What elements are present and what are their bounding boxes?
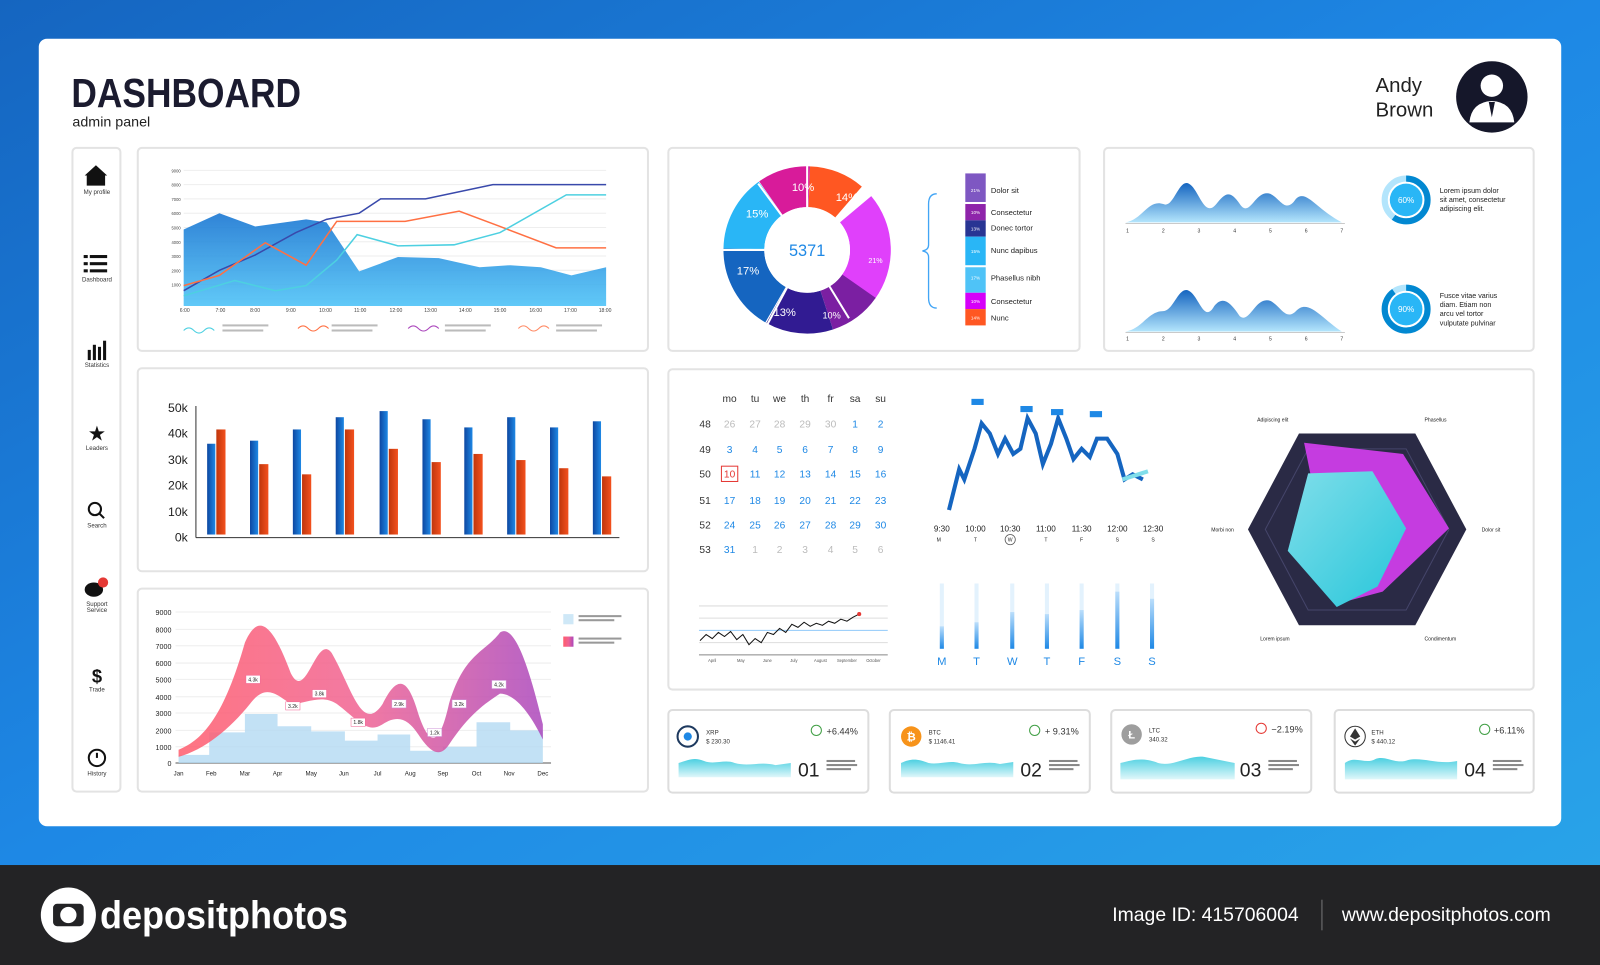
calendar: 26	[774, 520, 786, 531]
crypto card: ETH: ETH	[1371, 729, 1384, 736]
title: DASHBOARD	[71, 70, 301, 116]
panel: area wave chart: Oct	[472, 770, 482, 777]
calendar: 31	[724, 545, 736, 556]
panel: wave charts: adipiscing elit.	[1440, 205, 1485, 213]
sidebar: Dashboard	[82, 277, 112, 284]
crypto card: LTC: −2.19%	[1271, 724, 1303, 734]
panel: line chart: 4000	[172, 240, 181, 245]
panel: line chart	[138, 148, 648, 351]
footer bar: depositphotos	[100, 894, 348, 937]
calendar: 29	[799, 419, 811, 430]
sidebar: Support	[86, 601, 108, 608]
small line chart: October	[866, 658, 881, 663]
panel: area wave chart: 4000	[156, 694, 171, 702]
panel: line chart: 16:00	[529, 308, 542, 314]
panel: donut: Nunc dapibus	[991, 246, 1038, 255]
panel: donut: 10%	[971, 210, 980, 215]
panel: area wave chart: Apr	[273, 770, 282, 777]
footer bar: Image ID: 415706004	[1112, 904, 1299, 926]
calendar: 2	[878, 419, 884, 430]
panel: donut: Nunc	[991, 313, 1009, 322]
calendar: 15	[849, 469, 861, 480]
vertical progress bars: S	[1114, 656, 1121, 668]
panel: area wave chart: Feb	[206, 770, 217, 777]
panel: wave charts: 4	[1233, 337, 1236, 343]
crypto card: XRP: 01	[798, 759, 820, 781]
panel: donut: 14%	[971, 315, 980, 320]
small line chart: July	[790, 658, 798, 663]
panel: wave charts: 3	[1198, 337, 1201, 343]
panel: donut: Consectetur	[991, 297, 1032, 306]
small line chart: June	[763, 658, 773, 663]
panel: line chart: 9000	[172, 168, 181, 173]
vertical progress bars: F	[1078, 656, 1085, 668]
calendar: 4	[752, 445, 758, 456]
panel: area wave chart: 3.2k	[454, 702, 464, 708]
panel: area wave chart: Sep	[437, 770, 449, 777]
calendar: 27	[749, 419, 761, 430]
stock line chart: 10:00	[965, 524, 986, 533]
panel: wave charts: 7	[1340, 229, 1343, 235]
small line chart	[699, 606, 888, 663]
calendar: sa	[850, 394, 861, 405]
crypto card: LTC: 340.32	[1149, 737, 1168, 744]
panel: donut: 10%	[792, 182, 814, 194]
panel: bar chart: 40k	[168, 427, 189, 441]
calendar: th	[801, 394, 809, 405]
calendar: 5	[777, 445, 783, 456]
panel: wave charts: 4	[1233, 229, 1236, 235]
panel: line chart: 12:00	[390, 308, 402, 314]
stock line chart: F	[1080, 538, 1083, 544]
stock line chart: 12:00	[1107, 524, 1128, 533]
panel: line chart: 6:00	[180, 308, 190, 314]
panel: area wave chart: Jan	[174, 770, 184, 777]
panel: wave charts: 1	[1126, 229, 1129, 235]
calendar: 53	[699, 545, 711, 556]
panel: donut: 10%	[822, 310, 841, 320]
stock line chart: 9:30	[934, 524, 950, 533]
panel: wave charts: 60%	[1398, 196, 1414, 205]
panel: area wave chart: 1000	[156, 744, 171, 752]
panel: wave charts: 2	[1162, 229, 1165, 235]
hexagon radar chart: Adipiscing elit	[1257, 417, 1289, 423]
panel: area wave chart: 3.2k	[288, 704, 298, 710]
panel: line chart: 6000	[172, 211, 181, 216]
panel: line chart: 18:00	[599, 308, 612, 314]
calendar: 52	[699, 520, 711, 531]
panel: area wave chart: 9000	[156, 609, 171, 617]
main card	[39, 39, 1561, 826]
panel: donut	[668, 148, 1080, 351]
panel: line chart: 11:00	[354, 308, 367, 314]
panel: area wave chart	[138, 589, 648, 792]
crypto card: XRP	[668, 710, 868, 793]
panel: donut: Donec tortor	[991, 224, 1033, 233]
panel: area wave chart: Dec	[537, 770, 548, 777]
small line chart: May	[737, 658, 746, 663]
panel: donut: 17%	[737, 265, 759, 277]
panel: donut: Phasellus nibh	[991, 274, 1041, 283]
calendar: 20	[799, 496, 811, 507]
calendar: 1	[852, 419, 858, 430]
calendar: su	[875, 394, 886, 405]
user	[1376, 61, 1528, 133]
panel: wave charts: 90%	[1398, 305, 1414, 314]
panel: line chart: 3000	[172, 254, 181, 259]
calendar: 6	[878, 545, 884, 556]
panel: area wave chart: 1.2k	[430, 730, 440, 736]
panel: wave charts: arcu vel tortor	[1440, 310, 1484, 318]
panel: line chart: 5000	[172, 226, 181, 231]
panel: wave charts: sit amet, consectetur	[1440, 196, 1506, 204]
hexagon radar chart: Morbi non	[1211, 527, 1234, 533]
hexagon radar chart: Lorem ipsum	[1260, 637, 1290, 643]
stock line chart: S	[1151, 538, 1155, 544]
panel: donut: 10%	[971, 299, 980, 304]
panel: line chart: 9:00	[286, 308, 296, 314]
hexagon radar chart: Condimentum	[1424, 637, 1456, 643]
panel: line chart: 7:00	[215, 308, 226, 314]
panel: area wave chart: 6000	[156, 660, 171, 668]
panel: area wave chart: 3000	[156, 710, 171, 718]
sidebar: Search	[87, 522, 107, 529]
panel: area wave chart: Jul	[374, 770, 381, 777]
calendar: 7	[828, 445, 834, 456]
panel: line chart: 14:00	[459, 308, 472, 314]
crypto card: LTC: 03	[1240, 759, 1261, 781]
small line chart: August	[814, 658, 828, 663]
vertical progress bars: T	[1044, 656, 1051, 668]
crypto card: LTC: Ł	[1128, 730, 1135, 742]
crypto card: BTC: 02	[1020, 759, 1042, 781]
vertical progress bars: M	[937, 656, 947, 668]
panel: donut: 17%	[971, 276, 980, 281]
panel: area wave chart: Mar	[240, 770, 250, 777]
calendar: we	[772, 394, 786, 405]
calendar: 5	[852, 545, 858, 556]
stock line chart: T	[974, 538, 977, 544]
sidebar: Service	[87, 607, 108, 614]
panel: wave charts: 5	[1269, 337, 1272, 343]
calendar: 25	[749, 520, 761, 531]
panel: area wave chart: Nov	[504, 770, 516, 777]
calendar: 28	[825, 520, 837, 531]
panel: donut: 21%	[868, 257, 883, 265]
stock line chart: 11:00	[1036, 524, 1056, 533]
panel: area wave chart: 4.3k	[248, 677, 258, 683]
calendar: 30	[875, 520, 887, 531]
panel: bar chart: 20k	[168, 479, 189, 493]
panel: wave charts: 5	[1269, 229, 1272, 235]
crypto card: XRP: +6.44%	[827, 726, 858, 736]
vertical progress bars: S	[1148, 656, 1156, 668]
calendar: 4	[828, 545, 834, 556]
calendar: 12	[774, 469, 786, 480]
panel: area wave chart: Jun	[339, 770, 349, 777]
panel: wave charts: vulputate pulvinar	[1440, 319, 1496, 327]
stock line chart: 12:30	[1143, 524, 1164, 533]
sidebar: My profile	[84, 189, 111, 196]
footer bar	[0, 865, 1600, 965]
panel: donut: Dolor sit	[991, 186, 1020, 195]
panel: bar chart	[138, 368, 648, 571]
panel: donut: 5371	[789, 242, 825, 260]
crypto card: BTC: BTC	[929, 729, 941, 736]
sidebar: Leaders	[86, 445, 108, 452]
crypto card: LTC	[1111, 710, 1311, 793]
panel: wave charts: Lorem ipsum dolor	[1440, 187, 1499, 195]
panel: area wave chart: 0	[167, 760, 171, 768]
calendar	[699, 394, 887, 556]
sidebar: ★	[88, 424, 106, 446]
panel: area wave chart: 5000	[156, 676, 171, 684]
panel: donut: Consectetur	[991, 208, 1032, 217]
calendar: 18	[749, 496, 761, 507]
panel: area wave chart: 2.9k	[394, 702, 404, 708]
stock line chart: M	[937, 538, 941, 544]
small line chart: April	[708, 658, 716, 663]
panel: area wave chart: May	[305, 770, 318, 777]
calendar: 24	[724, 520, 736, 531]
panel: wave charts: 6	[1305, 337, 1308, 343]
small line chart: September	[837, 658, 858, 663]
panel: area wave chart: 4.2k	[494, 683, 504, 689]
panel: line chart: 8000	[172, 183, 181, 188]
panel: wave charts: 1	[1126, 337, 1129, 343]
sidebar: Statistics	[85, 362, 109, 369]
calendar: 8	[852, 445, 858, 456]
calendar: 51	[699, 496, 711, 507]
panel: line chart: 15:00	[494, 308, 507, 314]
panel: area wave chart: 7000	[156, 643, 171, 651]
user: Brown	[1376, 99, 1433, 121]
calendar: 22	[849, 496, 861, 507]
panel: big analytics	[668, 369, 1534, 690]
calendar: 26	[724, 419, 736, 430]
stock line chart: S	[1116, 538, 1120, 544]
crypto card: XRP: XRP	[706, 729, 719, 736]
calendar: 17	[724, 496, 736, 507]
hexagon radar chart: Dolor sit	[1482, 527, 1501, 533]
panel: donut: 15%	[746, 208, 768, 220]
calendar: 3	[727, 445, 733, 456]
panel: wave charts: diam. Etiam non	[1440, 301, 1491, 309]
footer bar: www.depositphotos.com	[1341, 904, 1551, 926]
panel: line chart: 2000	[172, 268, 181, 273]
panel: donut: 13%	[971, 227, 980, 232]
panel: wave charts: 3	[1198, 229, 1201, 235]
calendar: fr	[827, 394, 834, 405]
calendar: 11	[750, 469, 761, 480]
panel: wave charts: 7	[1340, 337, 1343, 343]
panel: donut: 21%	[971, 188, 980, 193]
crypto card: BTC	[890, 710, 1090, 793]
crypto card: ETH: +6.11%	[1494, 725, 1525, 735]
vertical progress bars	[937, 583, 1156, 668]
sidebar	[72, 148, 120, 792]
panel: bar chart: 50k	[168, 401, 189, 415]
panel: wave charts: Fusce vitae varius	[1440, 292, 1498, 300]
stock line chart	[934, 399, 1164, 545]
calendar: 19	[774, 496, 786, 507]
panel: bar chart: 0k	[175, 531, 189, 545]
crypto card: XRP: $ 230.30	[706, 739, 731, 746]
calendar: 23	[875, 496, 887, 507]
calendar: 6	[802, 445, 808, 456]
stock line chart: 10:30	[1000, 524, 1021, 533]
panel: donut: 14%	[836, 192, 858, 204]
hexagon radar chart: Phasellus	[1424, 417, 1447, 423]
panel: area wave chart: Aug	[405, 770, 416, 777]
title	[71, 70, 301, 130]
crypto card: ETH	[1335, 710, 1534, 793]
panel: line chart: 17:00	[564, 308, 577, 314]
crypto card: BTC: $ 1146.41	[929, 739, 956, 746]
panel: line chart: 10:00	[319, 308, 332, 314]
stock line chart: T	[1044, 538, 1047, 544]
panel: line chart: 7000	[172, 197, 181, 202]
panel: bar chart: 30k	[168, 453, 189, 467]
sidebar: History	[87, 770, 107, 777]
calendar: 2	[777, 545, 783, 556]
calendar: 29	[849, 520, 861, 531]
stock line chart: W	[1008, 538, 1013, 544]
sidebar: Trade	[89, 687, 105, 694]
calendar: 48	[699, 419, 711, 430]
crypto card: LTC: LTC	[1149, 727, 1161, 734]
panel: area wave chart: 1.8k	[353, 720, 363, 726]
calendar: 10	[724, 469, 736, 480]
panel: wave charts: 2	[1162, 337, 1165, 343]
calendar: 49	[699, 445, 711, 456]
stock line chart: 11:30	[1072, 524, 1092, 533]
crypto card: BTC: ₿	[907, 732, 916, 744]
calendar: 28	[774, 419, 786, 430]
calendar: 27	[799, 520, 811, 531]
calendar: 14	[825, 469, 837, 480]
calendar: 30	[825, 419, 837, 430]
vertical progress bars: W	[1007, 656, 1018, 668]
user: Andy	[1376, 75, 1423, 97]
calendar: 13	[799, 469, 811, 480]
sidebar: $	[92, 665, 102, 686]
calendar: 50	[699, 469, 711, 480]
panel: line chart: 8:00	[250, 308, 260, 314]
calendar: tu	[751, 394, 759, 405]
panel: donut: 15%	[971, 249, 980, 254]
crypto card: ETH: 04	[1464, 759, 1486, 781]
panel: area wave chart: 8000	[156, 626, 171, 634]
panel: wave charts: 6	[1305, 229, 1308, 235]
calendar: 1	[752, 545, 758, 556]
vertical progress bars: T	[973, 656, 980, 668]
crypto card: BTC: + 9.31%	[1045, 726, 1079, 736]
panel: line chart: 1000	[172, 283, 181, 288]
calendar: 3	[802, 545, 808, 556]
calendar: 16	[875, 469, 887, 480]
crypto card: ETH: $ 440.12	[1371, 739, 1396, 746]
panel: wave charts	[1104, 148, 1534, 351]
title: admin panel	[72, 114, 150, 130]
hexagon radar chart	[1211, 417, 1501, 643]
panel: bar chart: 10k	[168, 505, 189, 519]
calendar: mo	[723, 394, 737, 405]
panel: line chart: 13:00	[424, 308, 437, 314]
panel: area wave chart: 3.8k	[315, 692, 325, 698]
panel: donut: 13%	[773, 307, 796, 319]
calendar: 9	[878, 445, 884, 456]
panel: area wave chart: 2000	[156, 727, 171, 735]
calendar: 21	[825, 496, 837, 507]
